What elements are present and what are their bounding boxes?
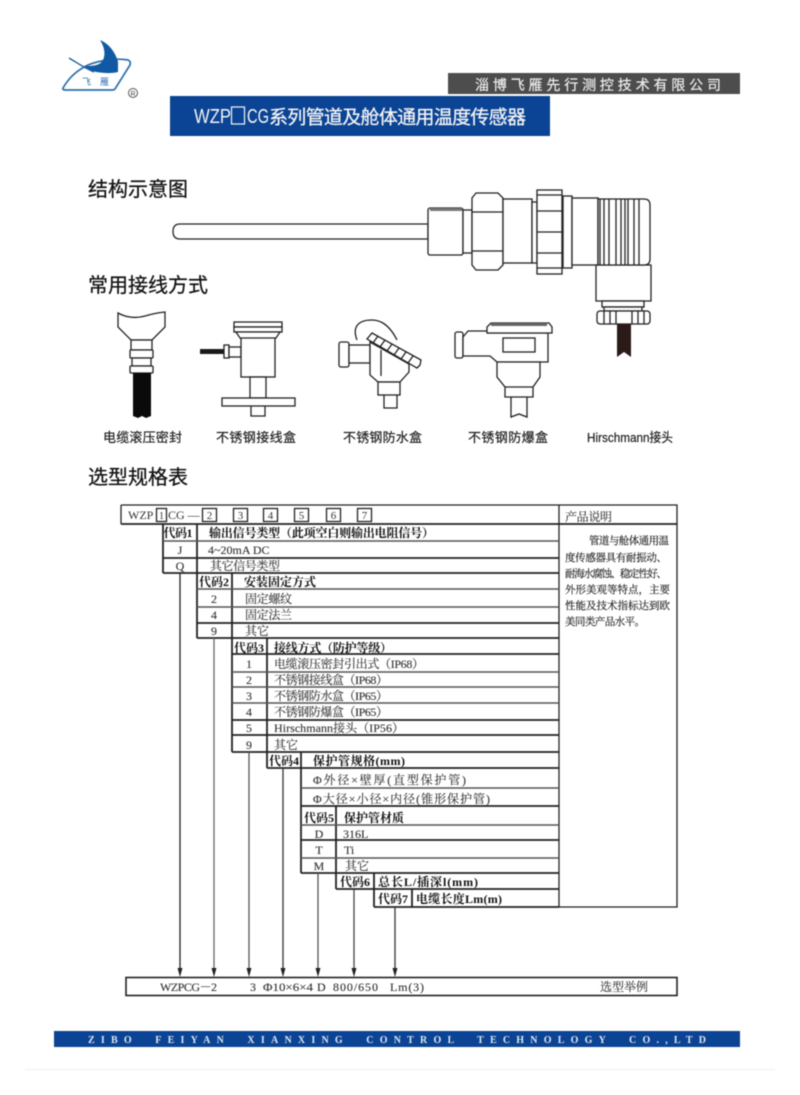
section 2: mounting: 安装固定方式 [244, 574, 316, 589]
section 3: wiring and protection: 3 [246, 689, 252, 703]
section 3: wiring and protection [234, 640, 424, 752]
icon: stainless explosion-proof box [455, 323, 552, 417]
section 5: tube material [304, 810, 404, 873]
section 3: wiring and protection: 接线方式（防护等级） [274, 640, 392, 655]
section 3: wiring and protection: 不锈钢防爆盒（IP65） [274, 704, 388, 719]
table frame [121, 505, 677, 907]
heading: selection table: 选型规格表 [88, 466, 188, 489]
wiring method labels [103, 430, 673, 445]
footer company name bar: ZIBO FEIYAN XIANXING CONTROL TECHNOLOGY CO.,LTD [88, 1035, 706, 1046]
logo: flying goose: 雁 [100, 77, 109, 87]
section 3: wiring and protection: 1 [246, 657, 252, 671]
section 5: tube material: 316L [343, 827, 368, 841]
selection specification table [121, 505, 677, 907]
section 1: output signal: 输出信号类型（此项空白则输出电阻信号） [209, 525, 434, 540]
section 5: tube material: T [315, 843, 323, 857]
section 2: mounting: 固定螺纹 [245, 591, 292, 606]
model code row: 1 [159, 511, 164, 522]
section 5: tube material: D [315, 827, 324, 841]
model code row [128, 508, 372, 522]
section 1: output signal: J [178, 543, 183, 557]
section 3: wiring and protection: 9 [246, 738, 252, 752]
section 5: tube material: 代码5 [304, 810, 334, 825]
product description panel [565, 509, 670, 628]
section 3: wiring and protection: 其它 [274, 737, 298, 752]
section 1: output signal: 其它信号类型 [210, 558, 280, 573]
model code row: 7 [362, 510, 368, 522]
section 7: cable length: 电缆长度Lm(m) [416, 891, 502, 906]
logo: flying goose: 飞 [82, 77, 91, 87]
section 5: tube material: 其它 [345, 858, 369, 873]
section 1: output signal: 4~20mA DC [208, 543, 270, 557]
section 3: wiring and protection: 不锈钢防水盒（IP65） [274, 688, 388, 703]
section 2: mounting: 2 [211, 592, 217, 606]
title banner [170, 96, 550, 136]
logo: flying goose: R [130, 91, 136, 98]
icon: stainless waterproof box [339, 320, 421, 408]
product description panel: 产品说明 [565, 509, 612, 524]
section 1: output signal: Q [176, 559, 185, 573]
heading: structure diagram: 结构示意图 [88, 178, 188, 201]
title banner: 系列管道及舱体通用温度传感器 [269, 106, 526, 128]
selection example row: Lm(3) [390, 980, 424, 994]
model code row: 5 [299, 510, 305, 522]
structure diagram: sensor [173, 190, 651, 357]
wiring method labels: 电缆滚压密封 [103, 430, 182, 445]
model code row: 6 [331, 510, 337, 522]
selection example row [126, 978, 677, 996]
footer company name bar [54, 1031, 740, 1047]
product description panel: 性能及技术指标达到欧 [565, 599, 670, 612]
arrows to selection example [178, 573, 398, 977]
section 2: mounting: 其它 [245, 623, 269, 638]
section 3: wiring and protection: 代码3 [234, 640, 264, 655]
selection example row: 3 [250, 980, 256, 994]
icon: cable compression seal [118, 312, 165, 418]
section 2: mounting: 4 [211, 608, 217, 622]
section 7: cable length: 代码7 [378, 891, 408, 906]
section 2: mounting: 代码2 [199, 574, 229, 589]
section 4: protection tube size [269, 753, 490, 806]
model code row: 4 [268, 510, 274, 522]
section 4: protection tube size: 保护管规格(mm) [313, 753, 405, 768]
section 4: protection tube size: Φ外径×壁厚(直型保护管) [313, 772, 466, 787]
model code row: CG — [168, 508, 201, 522]
wiring method labels: 不锈钢防水盒 [343, 430, 422, 445]
logo: flying goose [63, 40, 137, 98]
selection example row: 800/650 [333, 980, 378, 994]
title banner: CG [247, 106, 269, 128]
section 1: output signal: 代码1 [164, 525, 192, 540]
heading: wiring methods: 常用接线方式 [88, 274, 208, 297]
selection example row: Φ10×6×4 [263, 980, 313, 994]
section 3: wiring and protection: Hirschmann接头（IP56） [274, 720, 404, 735]
selection example row: D [317, 980, 326, 994]
section 2: mounting: 9 [211, 624, 217, 638]
section 1: output signal [164, 525, 434, 573]
product description panel: 美同类产品水平。 [565, 615, 645, 628]
section 3: wiring and protection: 不锈钢接线盒（IP68） [274, 672, 388, 687]
section 2: mounting: 固定法兰 [245, 607, 292, 622]
selection example row: WZPCG－2 [160, 980, 217, 994]
section 5: tube material: Ti [344, 843, 355, 857]
table rules [163, 524, 559, 907]
section 4: protection tube size: Φ大径×小径×内径(锥形保护管) [313, 791, 490, 806]
section 3: wiring and protection: 2 [246, 673, 252, 687]
product description panel: 外形美观等特点，主要 [565, 583, 670, 596]
section 4: protection tube size: 代码4 [269, 753, 299, 768]
selection example row: 选型举例 [600, 979, 648, 994]
section 5: tube material: 保护管材质 [344, 810, 404, 825]
section 5: tube material: M [314, 859, 325, 873]
icon: stainless junction box [200, 322, 295, 416]
section 3: wiring and protection: 4 [246, 705, 252, 719]
model code row: WZP [128, 508, 154, 522]
model code row: 3 [238, 510, 244, 522]
product description panel: 耐海水腐蚀、稳定性好、 [565, 567, 667, 580]
wiring method labels: 不锈钢防爆盒 [468, 430, 548, 445]
section 6: total length: 代码6 [340, 874, 370, 889]
product description panel: 管道与舱体通用温 [589, 534, 670, 547]
section 3: wiring and protection: 电缆滚压密封引出式（IP68） [274, 656, 424, 671]
section 7: cable length [378, 891, 502, 906]
section 3: wiring and protection: 5 [246, 721, 252, 735]
section 6: total length: 总长L/插深l(mm) [378, 874, 478, 889]
company name bar [448, 73, 740, 94]
wiring method labels: Hirschmann接头 [587, 430, 673, 445]
title banner: WZP [194, 106, 231, 128]
product description panel: 度传感器具有耐振动、 [565, 551, 667, 564]
wiring method labels: 不锈钢接线盒 [216, 430, 296, 445]
company name bar: 淄博飞雁先行测控技术有限公司 [475, 77, 721, 93]
section 2: mounting [199, 574, 316, 638]
model code row: 2 [207, 510, 212, 522]
section 6: total length [340, 874, 478, 889]
